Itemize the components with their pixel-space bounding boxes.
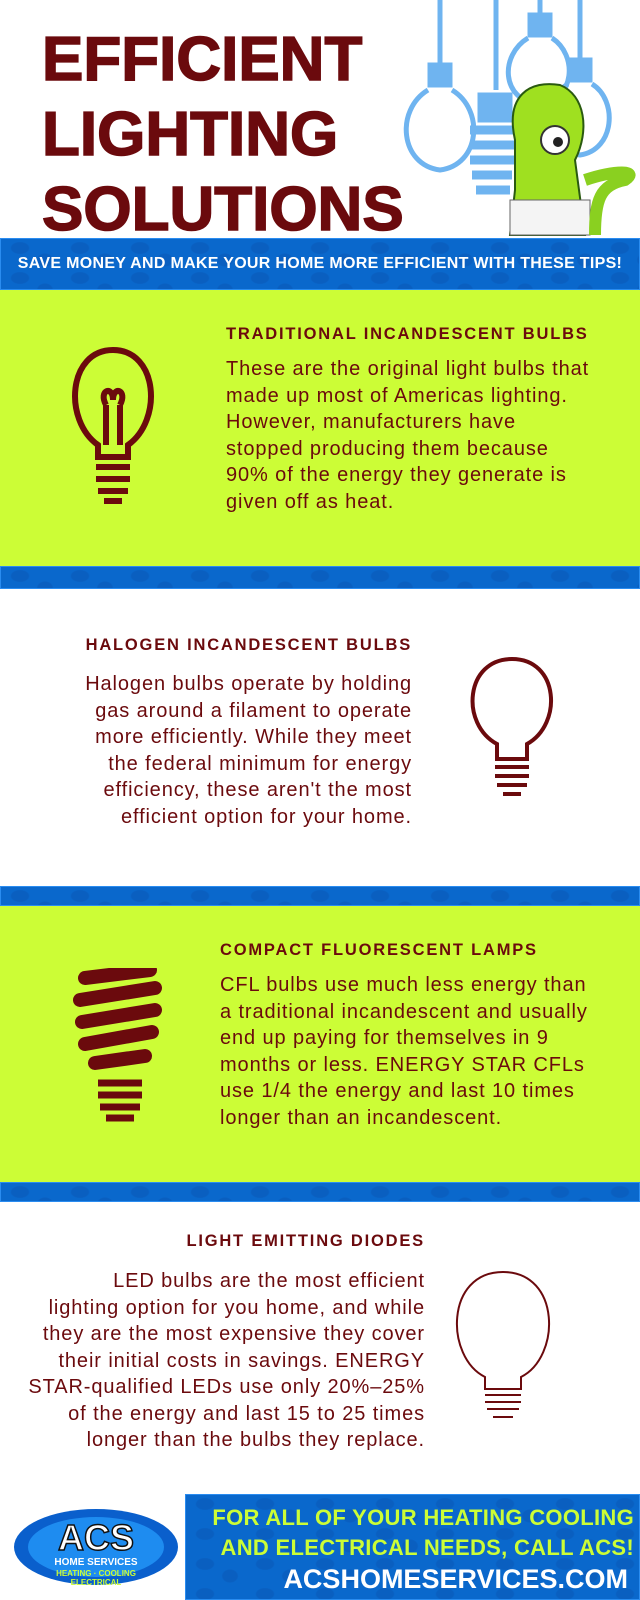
logo: ACS: ELECTRICAL — [71, 1578, 121, 1587]
banner: tagline — [0, 238, 640, 290]
text: However, manufacturers have — [226, 411, 516, 433]
text: longer than the bulbs they replace. — [87, 1429, 425, 1451]
icon: LED bulb — [456, 1271, 550, 1418]
logo: ACS: HOME SERVICES — [54, 1557, 138, 1568]
text: 90% of the energy they generate is — [226, 464, 567, 486]
panel: traditional incandescent — [0, 290, 640, 566]
text: lighting option for you home, and while — [49, 1296, 425, 1318]
title: LIGHTING — [42, 100, 338, 169]
text: a traditional incandescent and usually — [220, 1000, 588, 1022]
text: end up paying for themselves in 9 — [220, 1027, 549, 1049]
text — [220, 974, 588, 1128]
text: longer than an incandescent. — [220, 1106, 502, 1128]
text — [28, 1270, 425, 1451]
text — [85, 673, 412, 828]
panel: LED — [28, 1232, 550, 1451]
text — [226, 358, 589, 512]
heading: TRADITIONAL INCANDESCENT BULBS — [226, 325, 589, 343]
mascot — [510, 84, 629, 235]
icon: CFL bulb — [73, 968, 162, 1122]
text: the federal minimum for energy — [108, 752, 412, 774]
panel: CFL — [0, 906, 640, 1182]
text: more efficiently. While they meet — [95, 726, 412, 748]
illustration: hanging bulbs and mascot — [404, 0, 636, 236]
callout: call ACS: ACSHOMESERVICES.COM — [283, 1564, 628, 1594]
text: they are the most expensive they cover — [43, 1323, 425, 1345]
title — [42, 25, 404, 244]
text: their initial costs in savings. ENERGY — [58, 1350, 425, 1372]
heading: LIGHT EMITTING DIODES — [186, 1232, 425, 1250]
callout: call ACS: FOR ALL OF YOUR HEATING COOLING — [212, 1505, 634, 1530]
heading: COMPACT FLUORESCENT LAMPS — [220, 941, 538, 959]
logo: ACS: ACS — [58, 1517, 134, 1558]
title: EFFICIENT — [42, 25, 362, 94]
logo: ACS: HEATING · COOLING — [56, 1569, 136, 1578]
text: efficient option for your home. — [121, 806, 412, 828]
text: CFL bulbs use much less energy than — [220, 974, 586, 996]
text: STAR-qualified LEDs use only 20%–25% — [28, 1376, 425, 1398]
heading: HALOGEN INCANDESCENT BULBS — [86, 636, 412, 654]
text: made up most of Americas lighting. — [226, 384, 568, 406]
logo: ACS — [14, 1509, 178, 1587]
callout: call ACS — [185, 1494, 640, 1600]
callout: call ACS: AND ELECTRICAL NEEDS, CALL ACS! — [221, 1535, 634, 1560]
icon: halogen bulb — [470, 657, 554, 796]
text: These are the original light bulbs that — [226, 358, 589, 380]
panel: halogen — [85, 636, 554, 828]
text: given off as heat. — [226, 490, 394, 512]
text: months or less. ENERGY STAR CFLs — [220, 1054, 585, 1076]
text: efficiency, these aren't the most — [104, 779, 412, 801]
title: SOLUTIONS — [42, 175, 404, 244]
icon: incandescent bulb — [72, 347, 154, 504]
text: stopped producing them because — [226, 438, 549, 460]
text: use 1/4 the energy and last 10 times — [220, 1080, 575, 1102]
text: gas around a filament to operate — [95, 700, 412, 722]
text: LED bulbs are the most efficient — [113, 1270, 425, 1292]
banner: tagline: SAVE MONEY AND MAKE YOUR HOME MORE EFFICIENT WITH THESE TIPS! — [18, 255, 622, 272]
text: Halogen bulbs operate by holding — [85, 673, 412, 695]
text: of the energy and last 15 to 25 times — [68, 1402, 425, 1424]
